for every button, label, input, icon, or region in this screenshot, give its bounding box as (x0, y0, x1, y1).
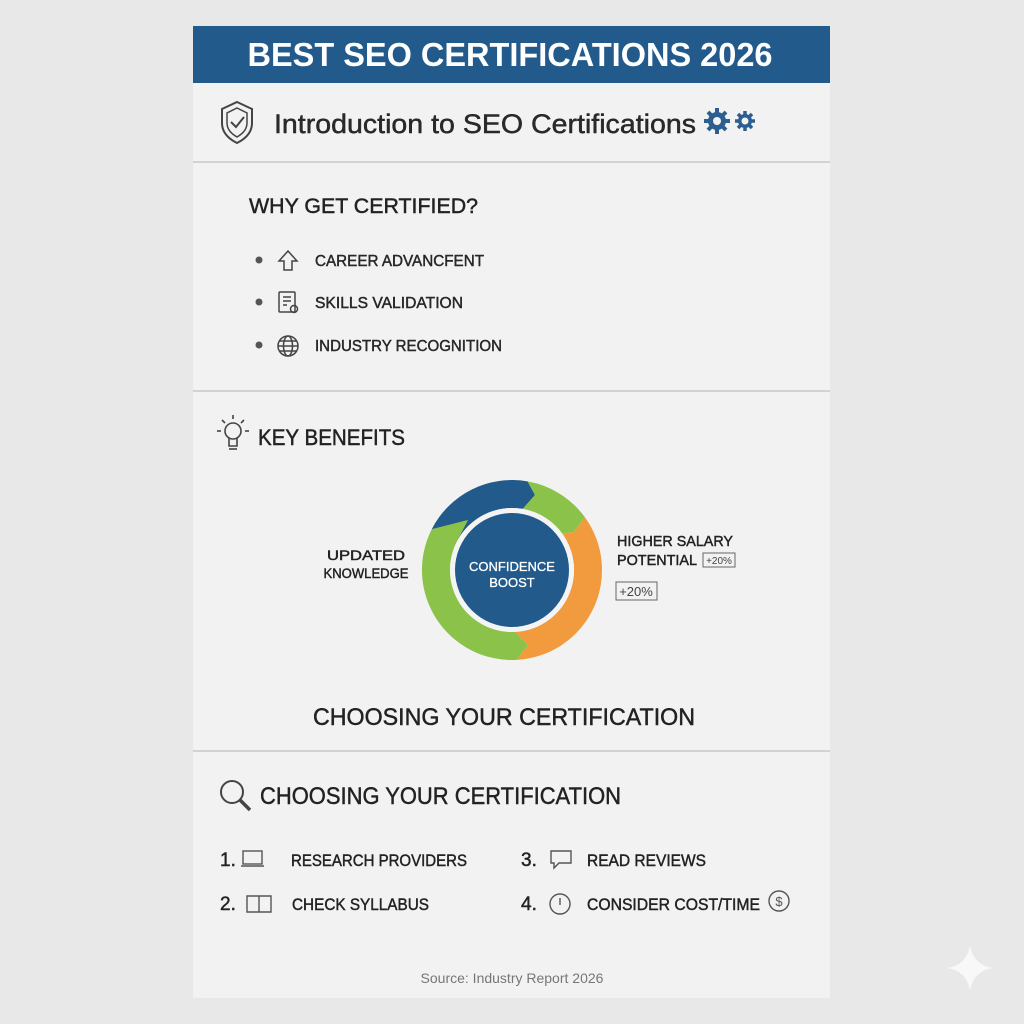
list: steps: CHECK SYLLABUS (292, 895, 429, 914)
icon: lightbulb (217, 415, 249, 449)
title: BEST SEO CERTIFICATIONS 2026 (248, 36, 772, 73)
list: steps (220, 850, 789, 915)
list: why get certified: CAREER ADVANCFENT (315, 253, 484, 270)
source note: Source: Industry Report 2026 (421, 970, 604, 986)
label: higher salary: POTENTIAL (617, 552, 697, 569)
list: why get certified: INDUSTRY RECOGNITION (315, 338, 502, 355)
label: updated knowledge: KNOWLEDGE (324, 565, 408, 581)
ring chart (422, 480, 602, 660)
list: steps: 1. (220, 850, 236, 871)
heading: why get certified: WHY GET CERTIFIED? (249, 195, 478, 218)
heading: key benefits: KEY BENEFITS (258, 425, 405, 450)
list: steps: RESEARCH PROVIDERS (291, 851, 467, 870)
intro heading: Introduction to SEO Certifications (274, 109, 696, 139)
label: higher salary (616, 533, 735, 600)
label: confidence boost: BOOST (489, 575, 535, 590)
list: steps: 3. (521, 850, 537, 871)
label: confidence boost (469, 559, 555, 590)
heading: choosing: CHOOSING YOUR CERTIFICATION (260, 783, 621, 810)
label: updated knowledge (324, 547, 408, 581)
card (193, 26, 830, 998)
list: why get certified (256, 251, 502, 356)
list: steps: $ (775, 894, 783, 909)
icon: magnifier (221, 781, 250, 810)
list: steps: CONSIDER COST/TIME (587, 895, 760, 914)
icon: sparkle (947, 945, 993, 991)
list: steps: READ REVIEWS (587, 851, 706, 870)
icon: shield (222, 102, 252, 143)
list: steps: 4. (521, 894, 537, 915)
label: higher salary: HIGHER SALARY (617, 533, 733, 550)
list: why get certified: SKILLS VALIDATION (315, 295, 463, 312)
heading: choosing (middle): CHOOSING YOUR CERTIFICATION (313, 704, 695, 731)
icon: gears (704, 108, 755, 134)
label: higher salary: +20% (619, 584, 653, 599)
label: updated knowledge: UPDATED (327, 547, 405, 563)
header bar (193, 26, 830, 83)
label: confidence boost: CONFIDENCE (469, 559, 555, 574)
label: higher salary: +20% (706, 556, 732, 567)
list: steps: 2. (220, 894, 236, 915)
